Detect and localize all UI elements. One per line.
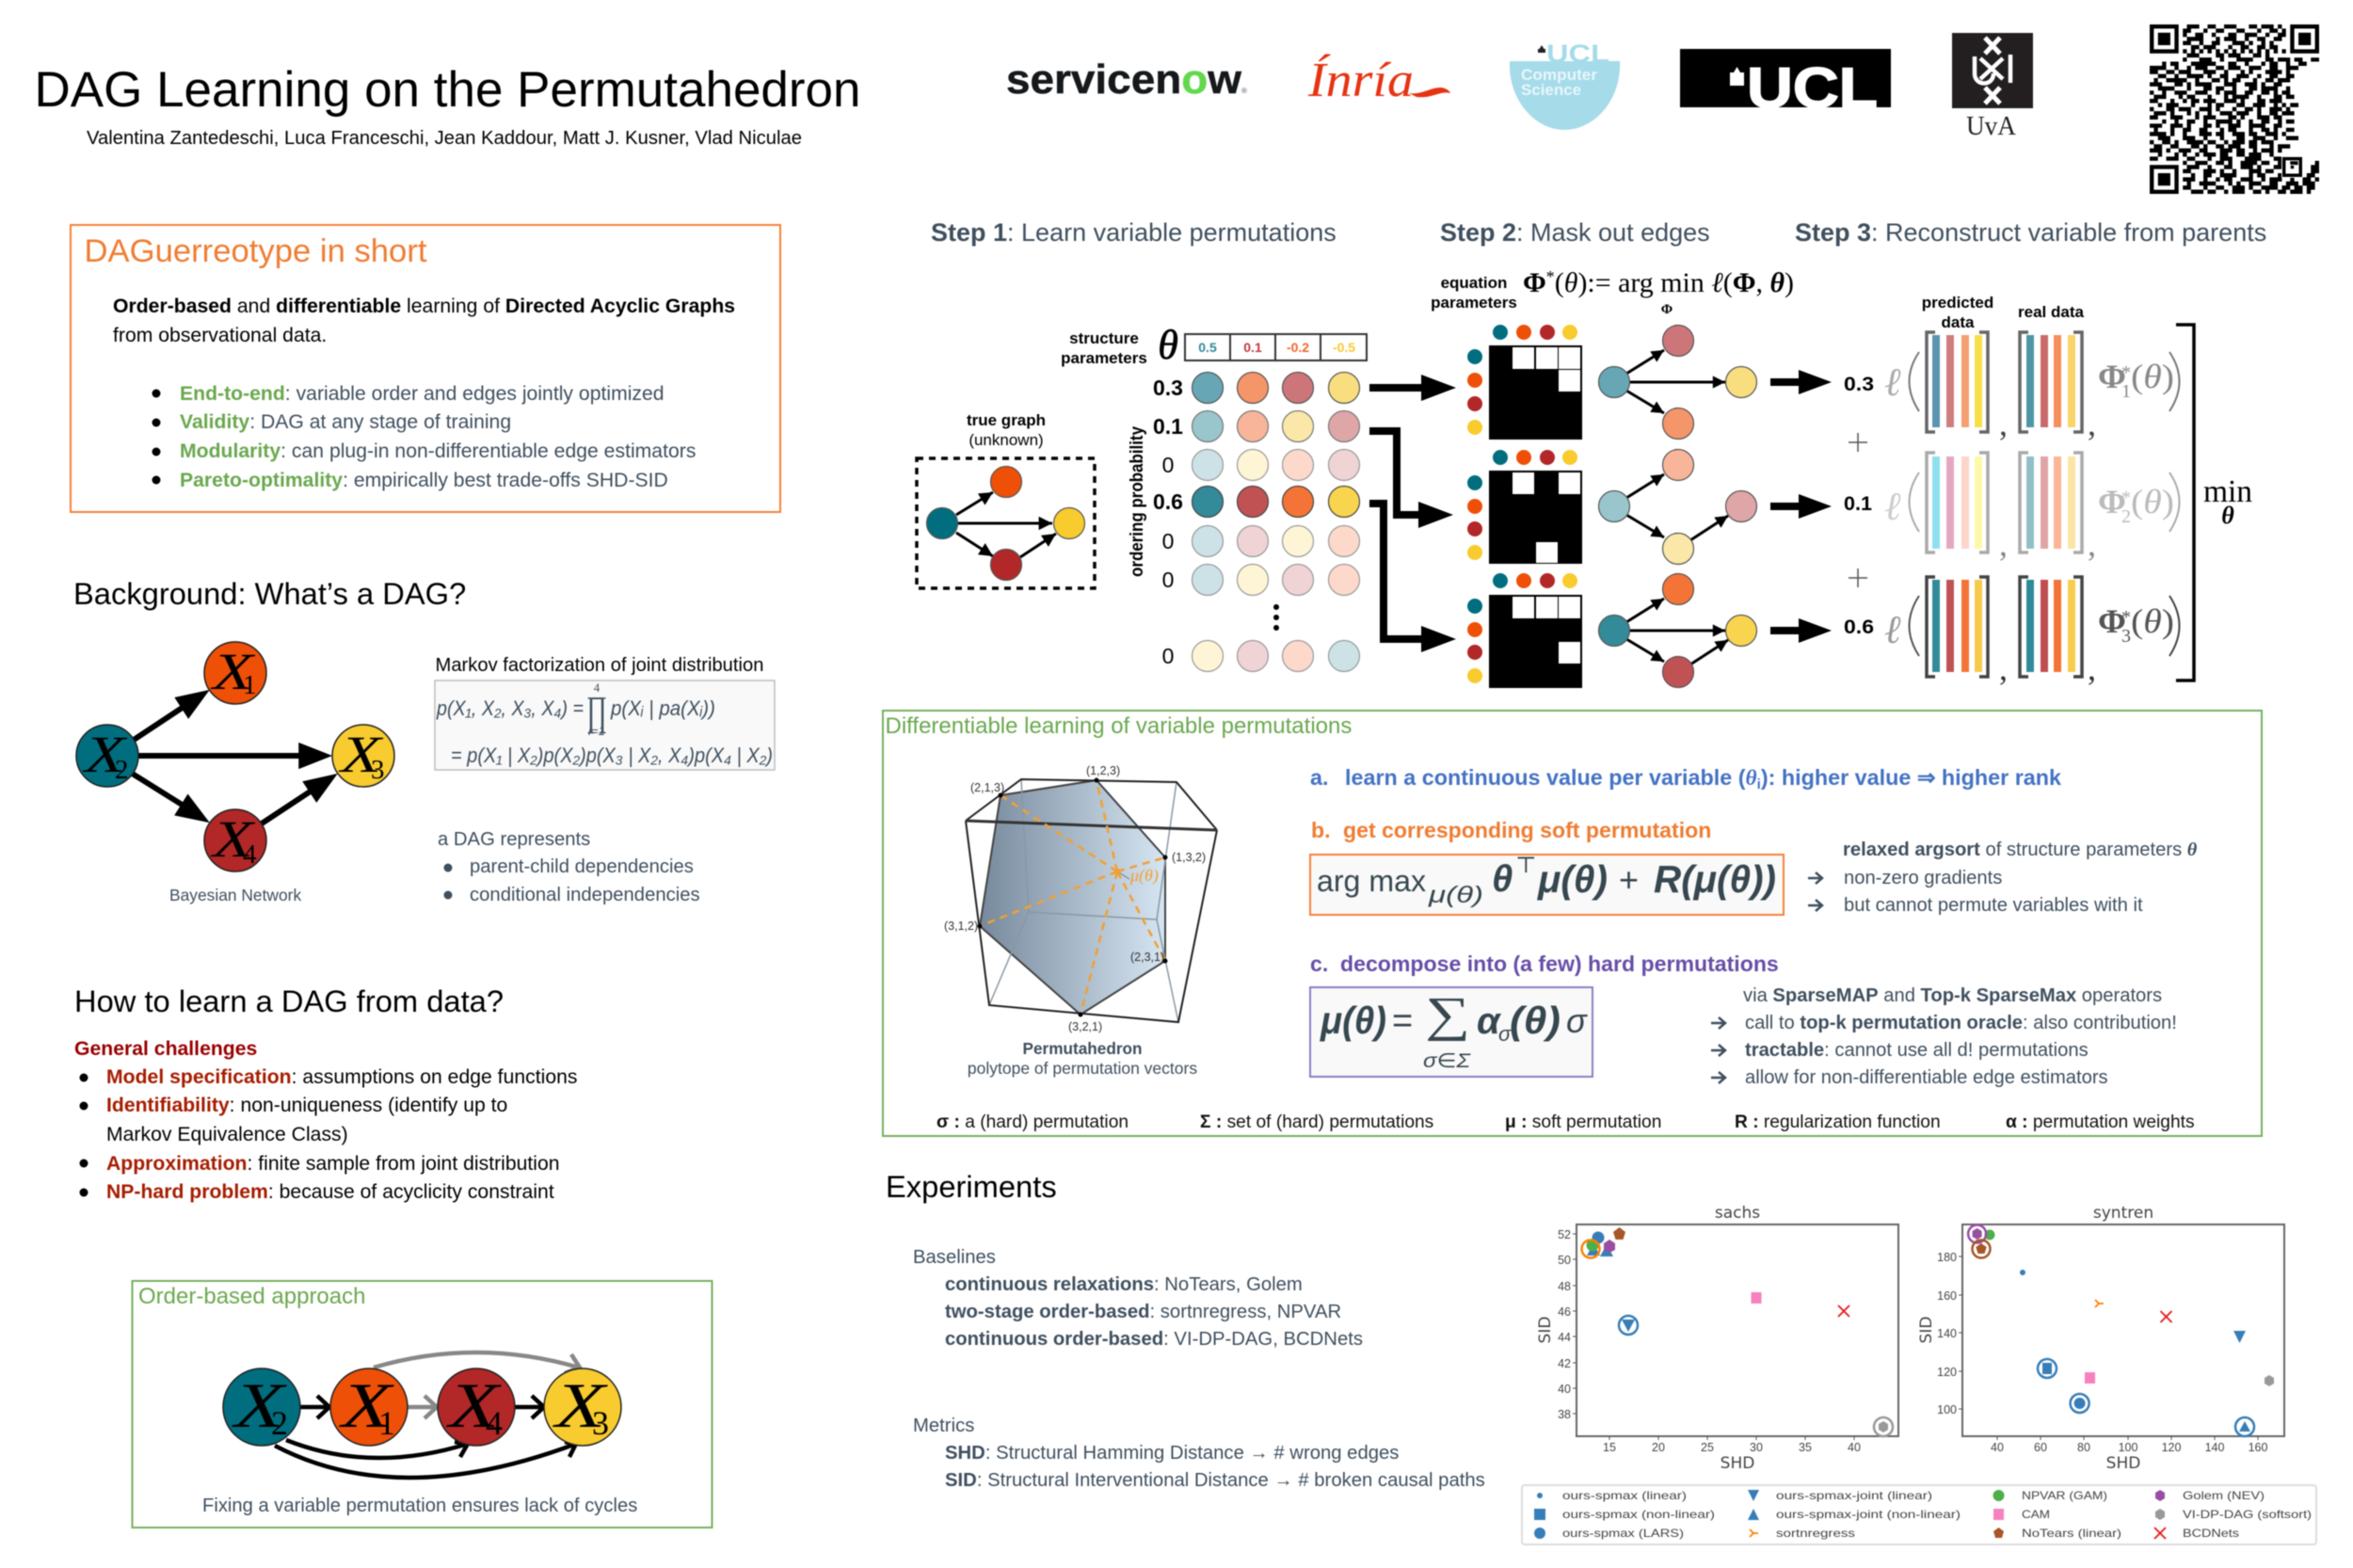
chart legend: VI-DP-DAG (softsort) bbox=[2183, 1508, 2312, 1521]
chart: sachs: 38 bbox=[1558, 1408, 1571, 1421]
notes: decomposition: call to top-k permutation oracle: also contribution! bbox=[1745, 1013, 2177, 1033]
diagram: Bayesian network: 4 bbox=[243, 840, 257, 870]
caption: fixing a permutation: Fixing a variable permutation ensures lack of cycles bbox=[202, 1496, 637, 1516]
logo: servicenow: servicenow bbox=[1006, 56, 1242, 103]
chart legend: CAM bbox=[2022, 1508, 2050, 1521]
chart legend: ours-spmax (non-linear) bbox=[1562, 1508, 1715, 1521]
panel: DAGuerreotype in short bbox=[71, 225, 780, 512]
chart: sachs: 44 bbox=[1558, 1331, 1571, 1344]
notation legend: R : regularization function bbox=[1735, 1112, 1941, 1132]
summary text: from observational data. bbox=[113, 325, 327, 346]
equation: argmin: Φ bbox=[1523, 267, 1546, 298]
graph 2 bbox=[1598, 450, 1756, 565]
step c heading: decompose into (a few) hard permutations bbox=[1340, 952, 1779, 976]
chart: sachs: 48 bbox=[1558, 1280, 1571, 1293]
chart: sachs: SID bbox=[1536, 1317, 1555, 1343]
heading: how to learn: How to learn a DAG from data? bbox=[74, 984, 504, 1018]
ordered graph: X bbox=[231, 1369, 287, 1441]
loss row 3: 3 bbox=[2121, 626, 2131, 647]
formula: Markov factorization: p(X₁, X₂, X₃, X₄) = bbox=[436, 696, 584, 720]
step b heading: b. bbox=[1311, 818, 1331, 842]
panel heading: differentiable learning: Differentiable learning of variable permutations bbox=[885, 713, 1352, 739]
panel: differentiable learning bbox=[883, 711, 2262, 1136]
chart: sachs: 40 bbox=[1558, 1383, 1571, 1396]
diagram: permutahedron: (3,2,1) bbox=[1068, 1020, 1102, 1033]
structure parameters table: -0.5 bbox=[1333, 340, 1355, 355]
heading: background: Background: What’s a DAG? bbox=[73, 576, 466, 611]
panel heading: DAGuerreotype in short bbox=[85, 233, 427, 269]
caption: Bayesian network: Bayesian Network bbox=[169, 886, 301, 904]
chart: sachs: 35 bbox=[1799, 1441, 1812, 1454]
chart: sachs bbox=[1536, 1204, 1898, 1473]
diagram: true graph: (unknown) bbox=[968, 431, 1044, 449]
structure parameters table: 0.5 bbox=[1198, 340, 1217, 355]
logo: UCL computer science: Computer bbox=[1521, 66, 1597, 84]
chart legend: ours-spmax (linear) bbox=[1562, 1489, 1687, 1502]
notes: decomposition bbox=[1711, 985, 2177, 1088]
text: metrics bbox=[913, 1416, 1485, 1491]
labels: predicted and real data: real data bbox=[2018, 303, 2085, 321]
diagram: Bayesian network: X bbox=[82, 726, 128, 783]
diagram: Bayesian network: X bbox=[338, 726, 384, 783]
text: metrics: SID: Structural Interventional Distance → # broken causal paths bbox=[945, 1470, 1485, 1491]
text: general challenges: Identifiability: non-uniqueness (identify up to bbox=[106, 1095, 507, 1116]
notes: decomposition: via SparseMAP and Top-k SparseMax operators bbox=[1743, 985, 2162, 1006]
title: DAG Learning on the Permutahedron bbox=[34, 62, 860, 118]
panel: order-based approach bbox=[132, 1281, 712, 1528]
notes: soft permutation: non-zero gradients bbox=[1844, 868, 2002, 888]
notes: decomposition: allow for non-differentiable edge estimators bbox=[1745, 1067, 2108, 1088]
formula: Markov factorization: 4 bbox=[594, 680, 600, 695]
formula: soft permutation: + bbox=[1619, 860, 1639, 899]
outer bracket and min bbox=[2176, 325, 2252, 680]
step a: i bbox=[1757, 776, 1761, 792]
diagram: permutahedron: (3,1,2) bbox=[944, 920, 978, 933]
chart: syntren: syntren bbox=[2093, 1204, 2153, 1223]
chart: sachs: 50 bbox=[1558, 1254, 1571, 1267]
text: metrics: SHD: Structural Hamming Distance → # wrong edges bbox=[945, 1443, 1399, 1464]
chart: sachs: SHD bbox=[1721, 1454, 1754, 1473]
ordered graph: X bbox=[552, 1369, 608, 1441]
notes: decomposition: tractable: cannot use all d! permutations bbox=[1745, 1040, 2089, 1061]
logo: UvA bbox=[1952, 33, 2033, 141]
loss row 2: , bbox=[1999, 525, 2008, 563]
formula: decomposition bbox=[1310, 987, 1593, 1077]
ordered graph: X bbox=[445, 1369, 502, 1441]
structure parameters table: -0.2 bbox=[1287, 340, 1309, 355]
chart: sachs: sachs bbox=[1715, 1204, 1760, 1223]
chart: sachs: 46 bbox=[1558, 1305, 1571, 1319]
chart: syntren: 180 bbox=[1937, 1251, 1957, 1264]
summary text bbox=[113, 296, 735, 346]
equation parameters label bbox=[1431, 274, 1517, 312]
text: baselines: continuous order-based: VI-DP-DAG, BCDNets bbox=[945, 1329, 1363, 1350]
equation: argmin bbox=[1523, 267, 1794, 317]
chart: syntren: 80 bbox=[2077, 1441, 2090, 1454]
chart: syntren: 120 bbox=[2162, 1441, 2181, 1454]
loss row 2 bbox=[1884, 453, 2180, 563]
diagram: true graph bbox=[917, 411, 1095, 588]
formula: Markov factorization bbox=[435, 680, 775, 770]
logo: UCL computer science bbox=[1510, 40, 1620, 130]
formula: decomposition: α bbox=[1477, 1000, 1502, 1042]
weights bbox=[1844, 374, 1874, 638]
formula: Markov factorization: p(Xᵢ | pa(Xᵢ)) bbox=[610, 696, 715, 720]
weights: 0.3 bbox=[1844, 374, 1874, 395]
formula: decomposition: σ bbox=[1566, 1001, 1588, 1040]
text: baselines: two-stage order-based: sortnregress, NPVAR bbox=[945, 1302, 1341, 1322]
labels: predicted and real data: data bbox=[1942, 313, 1975, 331]
ordered graph: 4 bbox=[486, 1404, 503, 1442]
step headings bbox=[931, 218, 2266, 247]
loss row 1: (θ) bbox=[2131, 358, 2174, 395]
structure parameters table bbox=[1061, 322, 1367, 368]
chart: syntren bbox=[1917, 1204, 2284, 1473]
step b heading: get corresponding soft permutation bbox=[1343, 818, 1711, 842]
loss row 3: (θ) bbox=[2131, 602, 2174, 640]
chart: syntren: 60 bbox=[2034, 1441, 2047, 1454]
text: a DAG represents: conditional independencies bbox=[470, 885, 700, 905]
diagram: true graph: true graph bbox=[967, 411, 1046, 429]
diagram: permutahedron: μ(θ) bbox=[1129, 866, 1159, 886]
loss row 1: * bbox=[2121, 362, 2131, 383]
key points: Modularity: can plug-in non-differentiable edge estimators bbox=[180, 440, 696, 462]
chart: sachs: 40 bbox=[1848, 1441, 1861, 1454]
diagram: permutahedron bbox=[944, 764, 1217, 1033]
key points bbox=[152, 383, 696, 491]
chart legend: ours-spmax-joint (linear) bbox=[1776, 1489, 1932, 1502]
logo: UCL computer science: UCL bbox=[1546, 40, 1609, 68]
graph 1 bbox=[1598, 326, 1756, 439]
notation legend: σ : a (hard) permutation bbox=[936, 1112, 1128, 1132]
chart: syntren: 160 bbox=[2249, 1441, 2267, 1454]
loss row 3: * bbox=[2121, 607, 2131, 628]
diagram: Bayesian network bbox=[76, 642, 394, 872]
chart: syntren: 120 bbox=[1937, 1366, 1957, 1379]
text: a DAG represents bbox=[438, 829, 700, 905]
loss row 2: ℓ bbox=[1884, 486, 1901, 529]
structure parameters table: structure bbox=[1069, 329, 1139, 347]
chart legend: BCDNets bbox=[2183, 1527, 2239, 1540]
outer bracket and min: min bbox=[2203, 474, 2252, 509]
chart: syntren: 100 bbox=[2119, 1441, 2137, 1454]
loss row 1: , bbox=[1999, 405, 2008, 442]
step a: ): higher value ⇒ higher rank bbox=[1761, 765, 2061, 790]
notation legend: μ : soft permutation bbox=[1505, 1112, 1661, 1132]
diagram: Bayesian network: 1 bbox=[243, 670, 256, 700]
step headings: Step 3: Reconstruct variable from parents bbox=[1795, 218, 2266, 247]
heading: experiments: Experiments bbox=[886, 1169, 1057, 1204]
loss row 3: , bbox=[2088, 649, 2096, 687]
step headings: Step 1: Learn variable permutations bbox=[931, 218, 1337, 247]
step headings: Step 2: Mask out edges bbox=[1440, 218, 1710, 247]
diagram: Bayesian network: X bbox=[210, 810, 256, 868]
loss row 1: 1 bbox=[2121, 381, 2131, 402]
chart: syntren: SID bbox=[1917, 1317, 1936, 1343]
loss row 3: ℓ bbox=[1884, 609, 1901, 652]
text: general challenges: Approximation: finite sample from joint distribution bbox=[106, 1153, 560, 1175]
structure parameters table: parameters bbox=[1061, 349, 1147, 367]
step a: θ bbox=[1746, 766, 1757, 791]
diagram: permutahedron: (1,2,3) bbox=[1086, 764, 1120, 777]
ordered graph: 1 bbox=[378, 1404, 395, 1442]
heading: Markov factorization: Markov factorization of joint distribution bbox=[435, 655, 763, 676]
notes: soft permutation: but cannot permute variables with it bbox=[1844, 895, 2143, 916]
formula: decomposition: (θ) bbox=[1510, 999, 1561, 1042]
ordering probability axis label: ordering probability bbox=[1128, 426, 1147, 577]
notation legend bbox=[936, 1112, 2195, 1132]
diagram: permutahedron: (2,1,3) bbox=[970, 781, 1004, 794]
loss row 1: ℓ bbox=[1884, 361, 1901, 405]
formula: Markov factorization: = p(X₁ | X₂)p(X₂)p(X₃ | X₂, X₄)p(X₄ | X₂) bbox=[451, 744, 773, 767]
edge mask 2 bbox=[1467, 450, 1582, 564]
permutation matrix of circles: 0 bbox=[1162, 644, 1174, 668]
permutation matrix of circles: 0 bbox=[1162, 568, 1174, 592]
caption: permutahedron: polytope of permutation vectors bbox=[968, 1059, 1197, 1078]
chart legend: ours-spmax-joint (non-linear) bbox=[1776, 1508, 1961, 1521]
chart legend bbox=[1522, 1485, 2316, 1544]
ordered graph: 2 bbox=[271, 1404, 288, 1442]
weights: 0.6 bbox=[1844, 616, 1874, 638]
text: a DAG represents: parent-child dependencies bbox=[470, 856, 694, 877]
loss row 3: Φ bbox=[2098, 602, 2126, 640]
text: baselines: continuous relaxations: NoTears, Golem bbox=[945, 1274, 1303, 1295]
permutation matrix of circles: 0.6 bbox=[1153, 489, 1183, 514]
logo: servicenow: ® bbox=[1241, 87, 1247, 95]
text: general challenges: Markov Equivalence Class) bbox=[106, 1124, 348, 1145]
permutation matrix of circles: 0.1 bbox=[1153, 414, 1183, 439]
diagram: Bayesian network: 2 bbox=[115, 755, 128, 785]
chart: syntren: 160 bbox=[1937, 1289, 1957, 1303]
text: a DAG represents: a DAG represents bbox=[438, 829, 590, 850]
loss row 2: Φ bbox=[2098, 483, 2126, 520]
key points: End-to-end: variable order and edges jointly optimized bbox=[180, 383, 664, 405]
equation: argmin: Φ bbox=[1661, 302, 1673, 317]
ordered graph: 3 bbox=[592, 1404, 609, 1442]
formula: soft permutation: μ(θ) bbox=[1537, 857, 1608, 901]
notes: soft permutation: relaxed argsort of structure parameters θ bbox=[1843, 840, 2198, 860]
formula: soft permutation: μ(θ) bbox=[1428, 882, 1483, 908]
formula: soft permutation: R(μ(θ)) bbox=[1654, 857, 1776, 901]
logo: UCL bbox=[1680, 49, 1891, 120]
chart: sachs: 52 bbox=[1558, 1228, 1571, 1241]
notation legend: Σ : set of (hard) permutations bbox=[1200, 1112, 1433, 1132]
chart: sachs: 20 bbox=[1652, 1441, 1665, 1454]
key points: Pareto-optimality: empirically best trade-offs SHD-SID bbox=[180, 470, 668, 491]
loss row 3 bbox=[1884, 577, 2180, 687]
loss row 2: (θ) bbox=[2131, 483, 2174, 520]
diagram: Bayesian network: 3 bbox=[371, 755, 384, 785]
loss row 2: , bbox=[2088, 525, 2096, 563]
logo: UvA: UvA bbox=[1966, 112, 2017, 141]
panel heading: order-based approach: Order-based approach bbox=[138, 1284, 365, 1309]
ordered graph bbox=[223, 1352, 621, 1478]
chart: syntren: SHD bbox=[2106, 1454, 2140, 1473]
chart: syntren: 140 bbox=[1937, 1327, 1957, 1340]
formula: Markov factorization: i=1 bbox=[588, 724, 605, 738]
formula: decomposition: ∑ bbox=[1425, 988, 1470, 1042]
text: general challenges: General challenges bbox=[74, 1038, 257, 1060]
text: general challenges bbox=[74, 1038, 578, 1203]
text: baselines: Baselines bbox=[913, 1247, 996, 1268]
chart legend: NoTears (linear) bbox=[2022, 1527, 2121, 1540]
formula: Markov factorization: ∏ bbox=[586, 688, 607, 734]
chart: syntren: 100 bbox=[1937, 1403, 1957, 1416]
logo: UCL: UCL bbox=[1747, 56, 1878, 120]
edge mask 3 bbox=[1467, 573, 1582, 688]
permutation matrix of circles: 0 bbox=[1162, 529, 1174, 553]
loss row 1: Φ bbox=[2098, 358, 2126, 395]
formula: soft permutation: ⊤ bbox=[1515, 854, 1537, 878]
text: metrics: Metrics bbox=[913, 1416, 974, 1436]
weights: 0.1 bbox=[1844, 493, 1872, 515]
chart: sachs: 15 bbox=[1603, 1441, 1616, 1454]
labels: predicted and real data bbox=[1922, 294, 2085, 331]
permutation matrix of circles: 0.3 bbox=[1153, 376, 1183, 400]
loss row 1: , bbox=[2088, 405, 2096, 442]
key points: Validity: DAG at any stage of training bbox=[180, 411, 511, 433]
formula: decomposition: μ(θ) bbox=[1320, 999, 1386, 1042]
chart: sachs: 25 bbox=[1701, 1441, 1714, 1454]
graph 3 bbox=[1598, 574, 1756, 687]
loss row 2: * bbox=[2121, 488, 2131, 508]
summary text: Order-based and differentiable learning of Directed Acyclic Graphs bbox=[113, 296, 735, 317]
logo: UCL computer science: Science bbox=[1521, 81, 1581, 99]
text: general challenges: NP-hard problem: because of acyclicity constraint bbox=[106, 1181, 554, 1203]
notes: soft permutation bbox=[1808, 840, 2198, 916]
formula: soft permutation: arg max bbox=[1317, 864, 1426, 898]
caption: permutahedron bbox=[968, 1039, 1197, 1078]
text: general challenges: Model specification: assumptions on edge functions bbox=[106, 1066, 578, 1088]
chart: syntren: 140 bbox=[2205, 1441, 2224, 1454]
equation: argmin: θ):= arg min ℓ(Φ, θ) bbox=[1564, 267, 1794, 298]
step c heading: c. bbox=[1310, 952, 1328, 976]
chart legend: Golem (NEV) bbox=[2183, 1489, 2265, 1502]
arrows: step 1 to step 2 bbox=[1369, 375, 1456, 652]
QR code bbox=[2150, 24, 2323, 194]
equation parameters label: parameters bbox=[1431, 294, 1517, 312]
equation parameters label: equation bbox=[1441, 274, 1507, 292]
authors: Valentina Zantedeschi, Luca Franceschi, Jean Kaddour, Matt J. Kusner, Vlad Niculae bbox=[87, 128, 802, 149]
diagram: Bayesian network: X bbox=[210, 643, 256, 700]
structure parameters table: 0.1 bbox=[1243, 340, 1262, 355]
labels: predicted and real data: predicted bbox=[1922, 294, 1993, 312]
ordered graph: X bbox=[338, 1369, 394, 1441]
edge mask 1 bbox=[1467, 325, 1582, 440]
plus signs bbox=[1849, 433, 1867, 587]
formula: decomposition: σ∈Σ bbox=[1423, 1050, 1472, 1072]
permutation matrix of circles bbox=[1153, 373, 1359, 672]
caption: permutahedron: Permutahedron bbox=[1022, 1039, 1143, 1058]
loss row 3: , bbox=[1999, 649, 2008, 687]
logo: inria: Ínría bbox=[1307, 53, 1414, 107]
formula: soft permutation: θ bbox=[1492, 858, 1513, 900]
chart: sachs: 30 bbox=[1750, 1441, 1763, 1454]
outer bracket and min: θ bbox=[2221, 502, 2234, 529]
logo: inria bbox=[1307, 53, 1450, 107]
chart: sachs: 42 bbox=[1558, 1357, 1571, 1370]
formula: decomposition: σ bbox=[1498, 1022, 1512, 1046]
chart legend: NPVAR (GAM) bbox=[2022, 1489, 2107, 1502]
equation: argmin: * bbox=[1546, 267, 1555, 286]
chart: syntren: 40 bbox=[1991, 1441, 2004, 1454]
chart legend: sortnregress bbox=[1776, 1527, 1855, 1540]
loss row 1 bbox=[1884, 332, 2180, 442]
step a: learn a continuous value per variable ( bbox=[1345, 765, 1746, 790]
formula: decomposition: = bbox=[1392, 1001, 1413, 1041]
diagram: permutahedron: (2,3,1) bbox=[1130, 951, 1164, 964]
loss row 2: 2 bbox=[2121, 506, 2131, 527]
notation legend: α : permutation weights bbox=[2006, 1112, 2195, 1132]
arrows: step 2 to step 3 bbox=[1770, 370, 1832, 643]
permutation matrix of circles: 0 bbox=[1162, 453, 1174, 477]
diagram: permutahedron: (1,3,2) bbox=[1172, 851, 1206, 864]
formula: soft permutation bbox=[1310, 854, 1784, 915]
structure parameters table: θ bbox=[1158, 322, 1178, 368]
text: baselines bbox=[913, 1247, 1363, 1350]
step a: a. bbox=[1310, 765, 1328, 790]
equation: argmin: ( bbox=[1555, 267, 1564, 298]
chart legend: ours-spmax (LARS) bbox=[1562, 1527, 1684, 1540]
